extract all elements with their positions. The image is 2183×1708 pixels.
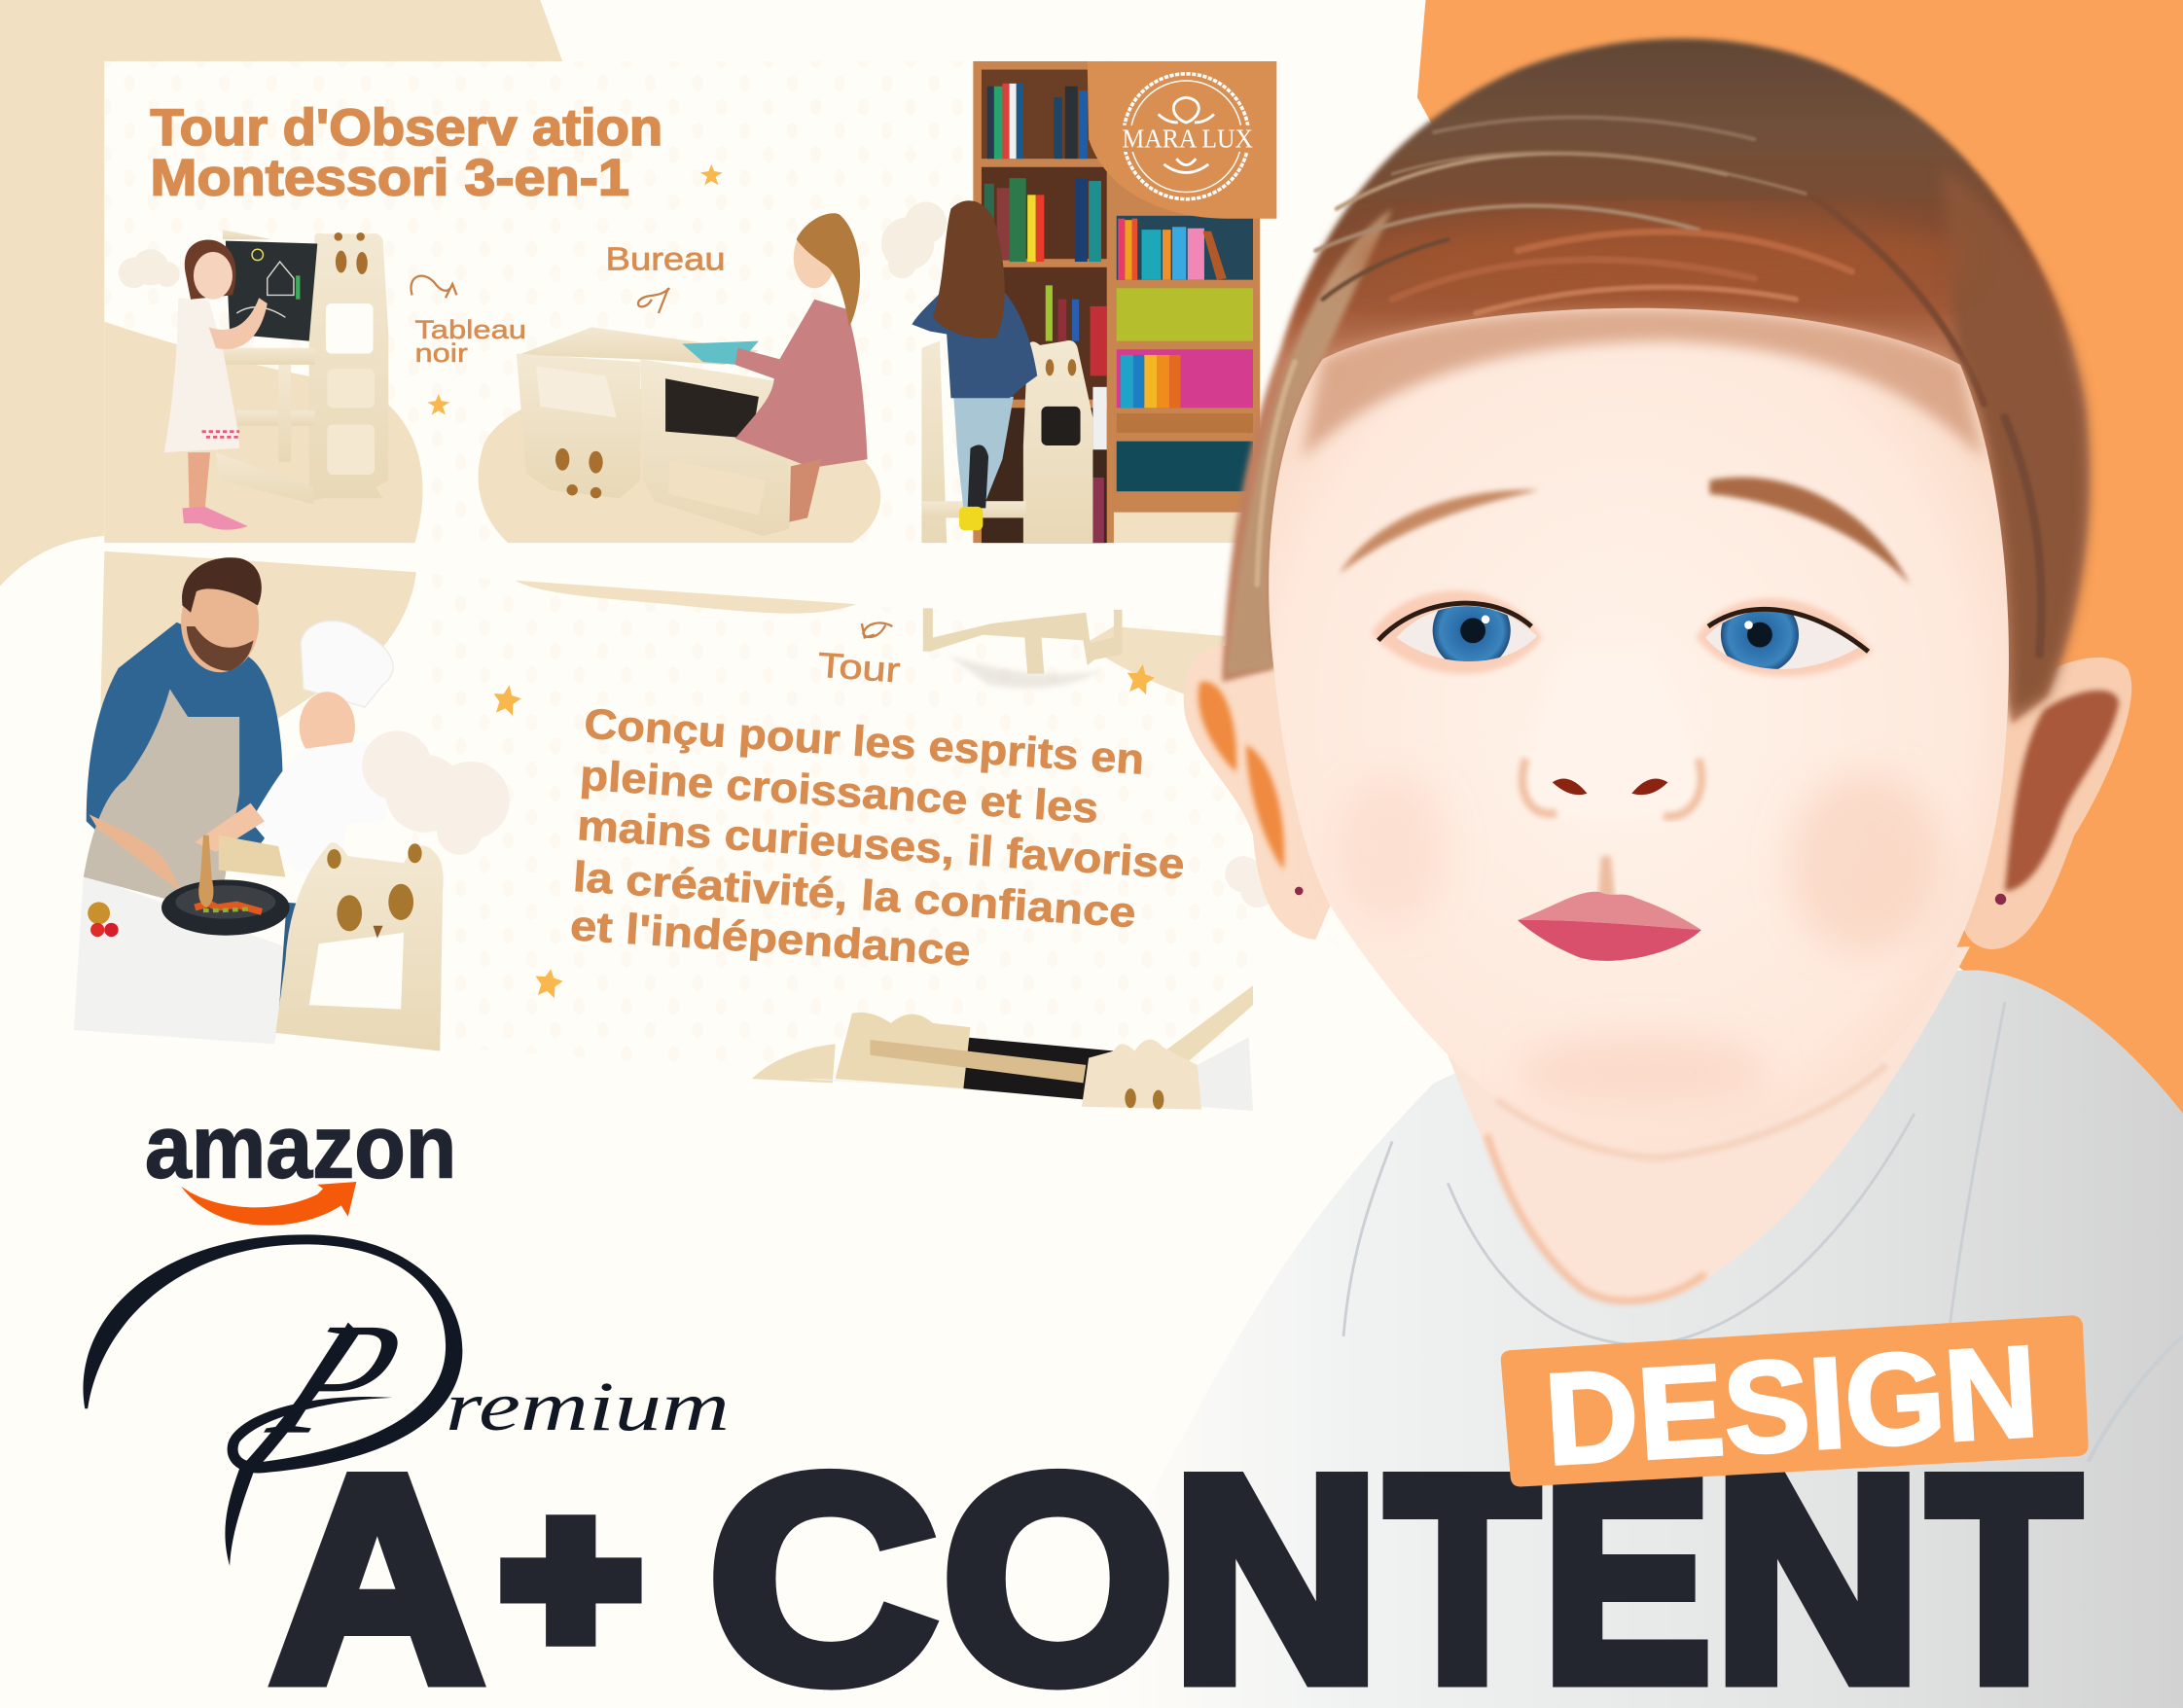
right ear inner (2005, 691, 2119, 891)
right ear (1961, 658, 2131, 949)
girl legs (789, 459, 821, 522)
letter P: P (247, 1291, 428, 1468)
girl arm (209, 298, 268, 349)
dotted pattern (404, 574, 1267, 1107)
panel background (104, 61, 1276, 543)
arrow (638, 288, 669, 313)
beige corner right (1086, 626, 1225, 703)
chef photo (74, 557, 444, 1051)
girl dress (164, 298, 239, 452)
hair streaks (1257, 118, 2041, 655)
chalkboard (226, 241, 317, 341)
pan (161, 879, 290, 936)
shoes (182, 507, 248, 530)
hair (933, 200, 1005, 338)
cloud (881, 202, 947, 278)
dotted pattern (104, 61, 995, 543)
child jeans (278, 903, 356, 1025)
icon: star (700, 164, 723, 185)
neck (1441, 946, 1970, 1303)
dress pattern (202, 432, 239, 437)
beige blob behind chef (97, 552, 416, 836)
frame (973, 61, 1114, 543)
girl legs (188, 452, 210, 513)
hair left side (1225, 209, 1392, 675)
amazon logo (145, 1098, 456, 1226)
girl hair (797, 213, 860, 327)
panda face (334, 232, 368, 274)
hair right side (1942, 167, 2088, 717)
left eyebrow (1340, 490, 1538, 574)
child hat (301, 621, 393, 707)
countertop (74, 874, 293, 1044)
paragraph: et l'indépendance (569, 902, 972, 976)
left ear inner (1199, 682, 1284, 870)
headline: A+ CONTENT (271, 1417, 2080, 1708)
paragraph (569, 700, 1186, 976)
arrow (862, 623, 892, 637)
tower base fragment (923, 608, 1122, 689)
face (1269, 308, 2009, 1152)
child head (300, 692, 355, 762)
label: Tableau noir: Tableau (414, 314, 526, 344)
chin line (1496, 1065, 1886, 1158)
panel: tilted lifestyle panel (74, 552, 1273, 1111)
hair red band (1350, 210, 1963, 304)
fruit (88, 902, 119, 937)
girl head and hair (185, 239, 236, 300)
bottom product strip (752, 985, 1253, 1111)
label: Bureau: Bureau (606, 241, 726, 277)
man shirt (87, 623, 283, 891)
beige corner shape (0, 0, 562, 587)
desk tower with girl (517, 213, 868, 536)
man beard (187, 626, 253, 671)
man arm (89, 814, 181, 891)
chalkboard tower with girl (164, 230, 388, 530)
ear studs (1295, 887, 2006, 905)
left eye (1372, 590, 1543, 674)
panda marks (1046, 359, 1076, 375)
wordmark: amazon (145, 1098, 456, 1197)
title: Tour d'Observ ation (151, 99, 662, 157)
nose (1522, 655, 1701, 898)
arrow (411, 276, 456, 298)
child arm (195, 803, 265, 852)
books (984, 84, 1227, 543)
girl dress (735, 300, 868, 468)
brand name: MARA LUX (1122, 125, 1253, 154)
beige blob left (104, 322, 423, 543)
bookshelf (973, 61, 1260, 543)
script heading: Premium (83, 1234, 730, 1566)
cardigan (912, 285, 1037, 398)
hair (1223, 39, 2089, 724)
paragraph: la créativité, la confiance (572, 853, 1137, 937)
shirt (1100, 970, 2183, 1708)
title: Montessori 3-en-1 (151, 149, 629, 206)
icon: star (532, 967, 564, 999)
badge background (1501, 1315, 2089, 1486)
smile (181, 1182, 356, 1226)
beige strip right (1100, 513, 1239, 543)
paragraph: mains curieuses, il favorise (576, 801, 1186, 888)
right eye (1696, 596, 1873, 676)
badge: DESIGN (1501, 1315, 2089, 1492)
chalk drawing (236, 249, 298, 317)
girl head (794, 227, 836, 288)
cheek blush (1337, 772, 1942, 1108)
icon: star (490, 683, 523, 716)
beige blob middle (479, 375, 880, 543)
beige sliver (516, 581, 856, 614)
title (151, 99, 662, 206)
label: Tableau noir (414, 314, 526, 368)
tower (216, 230, 388, 504)
jeans (953, 397, 1014, 508)
desk (517, 327, 789, 536)
paragraph: Conçu pour les esprits en (583, 700, 1146, 784)
child shirt (251, 740, 387, 891)
tower windows (326, 303, 374, 354)
blue paper (682, 341, 759, 365)
man head (181, 572, 259, 672)
neck shadow (1486, 1134, 1705, 1301)
seal band (1120, 125, 1253, 152)
hairline shading (1302, 308, 1984, 459)
right eyebrow (1709, 478, 1911, 585)
spatula (198, 836, 213, 907)
panda marks (555, 448, 603, 498)
orange backdrop (1417, 0, 2183, 1121)
cloud small (1225, 856, 1273, 907)
shirt seams (1343, 1002, 2183, 1462)
icon: star (1125, 661, 1157, 695)
tower window (1041, 407, 1081, 445)
man hair (182, 557, 262, 613)
back-facing girl on tower (912, 200, 1092, 543)
logo badge (1088, 61, 1276, 219)
word continuation: remium (446, 1369, 730, 1445)
badge text: DESIGN (1541, 1320, 2042, 1492)
left ear (1184, 646, 1337, 940)
panel: product overview (104, 61, 1276, 543)
panda tower (219, 836, 444, 1051)
man apron (84, 689, 239, 905)
label: Tour: Tour (817, 646, 902, 690)
flourish (83, 1234, 462, 1473)
shoes (968, 445, 988, 508)
icon: star (427, 394, 449, 414)
cloud (119, 249, 180, 288)
baby photo (1100, 39, 2183, 1708)
badge shape (1088, 61, 1276, 219)
paragraph: pleine croissance et les (579, 752, 1100, 833)
logo seal (1124, 74, 1249, 199)
tower (921, 340, 1092, 543)
lips (1518, 892, 1701, 961)
label: Tableau noir: noir (414, 338, 468, 368)
headline: A+ CONTENT: + (503, 1458, 639, 1699)
desk windows (536, 366, 617, 417)
stem and tail (225, 1323, 359, 1566)
cloud (362, 730, 510, 855)
